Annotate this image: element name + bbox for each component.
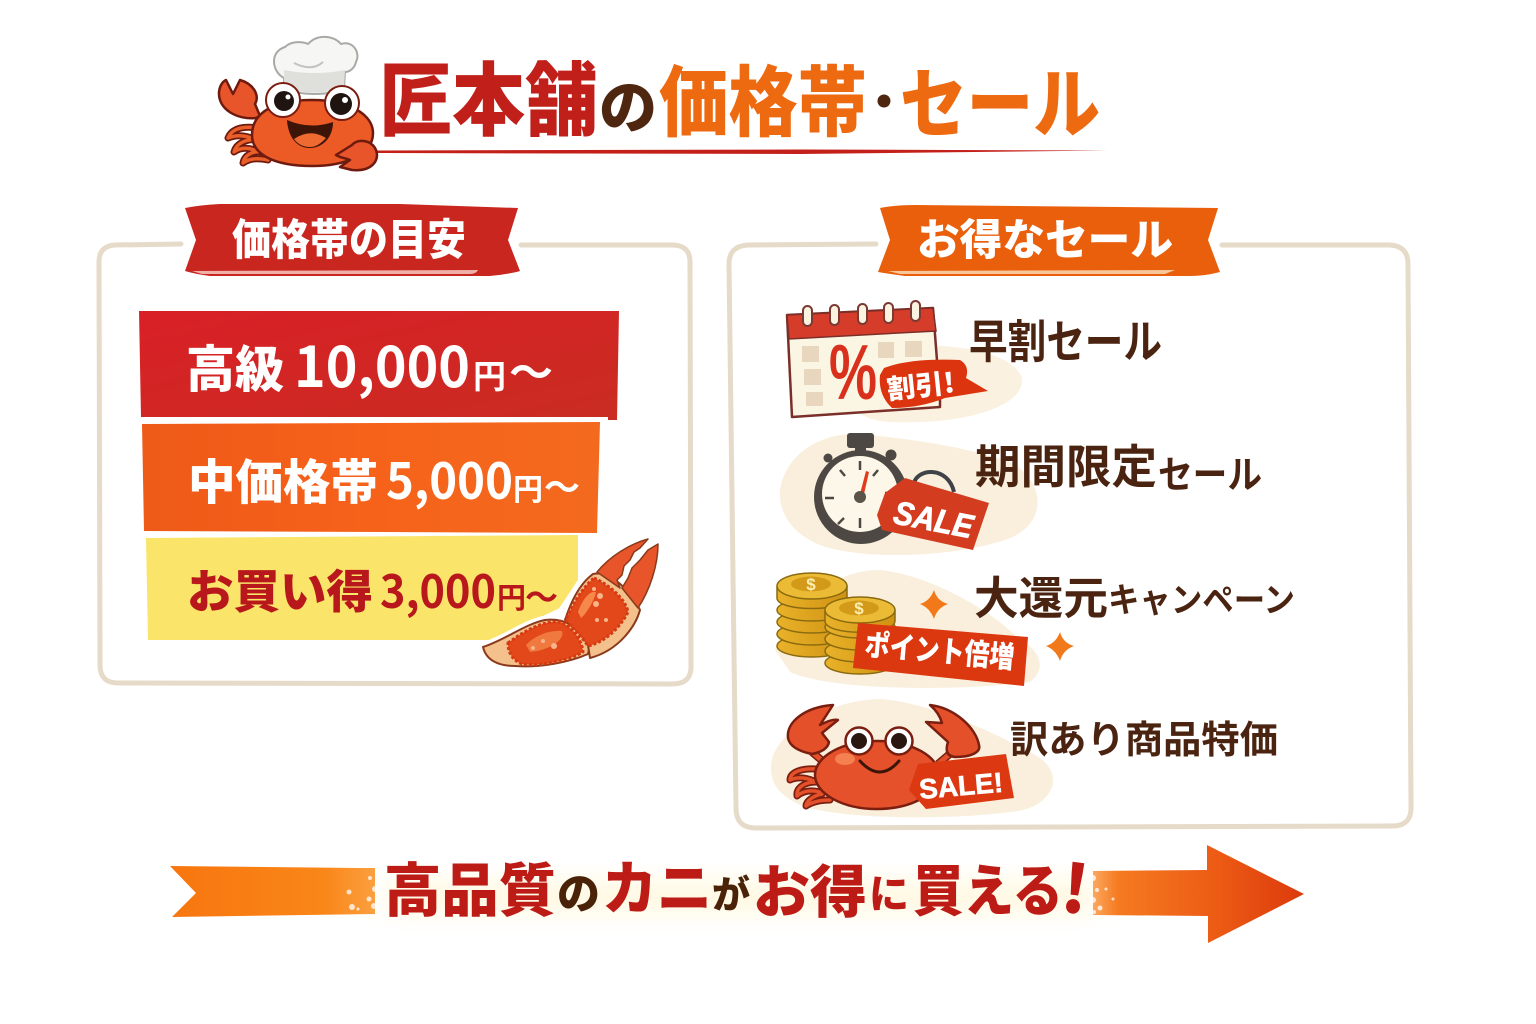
icon: crab mascot with chef hat <box>219 37 377 170</box>
panel border <box>729 244 1411 828</box>
bar: value: お買い得 <box>187 556 373 622</box>
bar: value <box>146 535 578 640</box>
banner text: に <box>869 862 909 920</box>
ribbon heading <box>185 204 520 276</box>
title text: dot <box>878 94 890 108</box>
bar: high: 円 <box>473 350 506 398</box>
label: 大還元 <box>974 562 1108 627</box>
eyes <box>266 83 300 117</box>
sale item: limited time <box>780 431 1262 555</box>
bar: high <box>139 311 619 420</box>
icon: crab <box>788 705 979 809</box>
tag: sale: SALE <box>891 494 977 545</box>
ribbon heading <box>878 205 1220 276</box>
tag: sale: SALE! <box>918 767 1004 805</box>
title underline <box>372 150 1108 154</box>
bar: value: 3,000 <box>380 556 496 622</box>
banner text: お得 <box>753 847 867 929</box>
tag: sale <box>909 754 1014 809</box>
label: 早割セール <box>969 306 1162 372</box>
blob <box>780 434 1038 555</box>
tag: warihiki <box>880 360 988 408</box>
bar: high: ～ <box>509 339 553 401</box>
right claw <box>336 141 377 170</box>
bar: value: 円 <box>497 575 526 617</box>
blob <box>771 699 1053 817</box>
right arrow <box>1090 845 1304 943</box>
icon: crab claw <box>483 535 665 668</box>
bar: mid: 円 <box>513 465 543 509</box>
blob <box>775 570 1040 688</box>
label: 訳あり商品特価 <box>1010 709 1278 764</box>
icon: sparkle <box>920 590 948 619</box>
tag: warihiki: 割引! <box>885 361 956 407</box>
bar: mid: 中価格帯 <box>188 443 378 513</box>
icon: sparkle <box>1046 632 1074 661</box>
body <box>252 100 373 166</box>
banner text: カニ <box>602 842 712 926</box>
ribbon heading: 価格帯の目安 <box>232 206 466 268</box>
legs <box>228 127 268 163</box>
icon: calendar <box>787 301 940 417</box>
title text: sale: セール <box>900 43 1100 153</box>
title heading <box>372 37 1108 154</box>
coin symbol: $ <box>854 599 864 618</box>
title text: no: の <box>599 61 657 145</box>
percent mark: % <box>829 328 877 416</box>
sale item: points campaign: キャンペーン <box>1108 573 1295 622</box>
icon: stopwatch <box>814 433 908 544</box>
bar: high: 高級 <box>186 330 284 402</box>
left ribbon arrow <box>170 866 378 917</box>
blob <box>848 345 1022 422</box>
sale item: limited time: セール <box>1158 444 1262 499</box>
ribbon heading: お得なセール <box>917 206 1173 268</box>
banner text: の <box>557 860 600 922</box>
panel border <box>99 244 691 684</box>
title text: brand: 匠本舗 <box>379 37 598 153</box>
panel: price ranges <box>99 204 691 684</box>
bottom banner <box>170 836 1304 943</box>
sale item: points campaign <box>775 562 1295 688</box>
bar: mid: ～ <box>544 459 580 511</box>
left claw <box>219 80 260 118</box>
title text: price range: 価格帯 <box>659 42 867 153</box>
banner text: が <box>712 864 750 919</box>
mouth <box>287 120 333 148</box>
bar: mid: 5,000 <box>386 442 513 514</box>
bar: value: ～ <box>525 571 558 619</box>
coin symbols: $ <box>806 575 816 594</box>
tag: point multiplier: ポイント倍増 <box>863 620 1016 677</box>
panel: sales <box>729 205 1411 828</box>
banner text: 買える <box>913 847 1063 928</box>
icon: coins <box>777 573 895 674</box>
sale item: early discount <box>787 301 1162 422</box>
banner text <box>384 836 1095 934</box>
hat <box>274 37 357 94</box>
bar: high: 10,000 <box>294 323 470 404</box>
text glow <box>385 880 1095 914</box>
sale item: outlet <box>771 699 1278 817</box>
banner text: 高品質 <box>384 844 556 928</box>
bar: mid <box>142 422 600 533</box>
banner text: ! <box>1057 836 1095 934</box>
tag: sale <box>877 472 989 550</box>
label: 期間限定 <box>975 431 1157 497</box>
